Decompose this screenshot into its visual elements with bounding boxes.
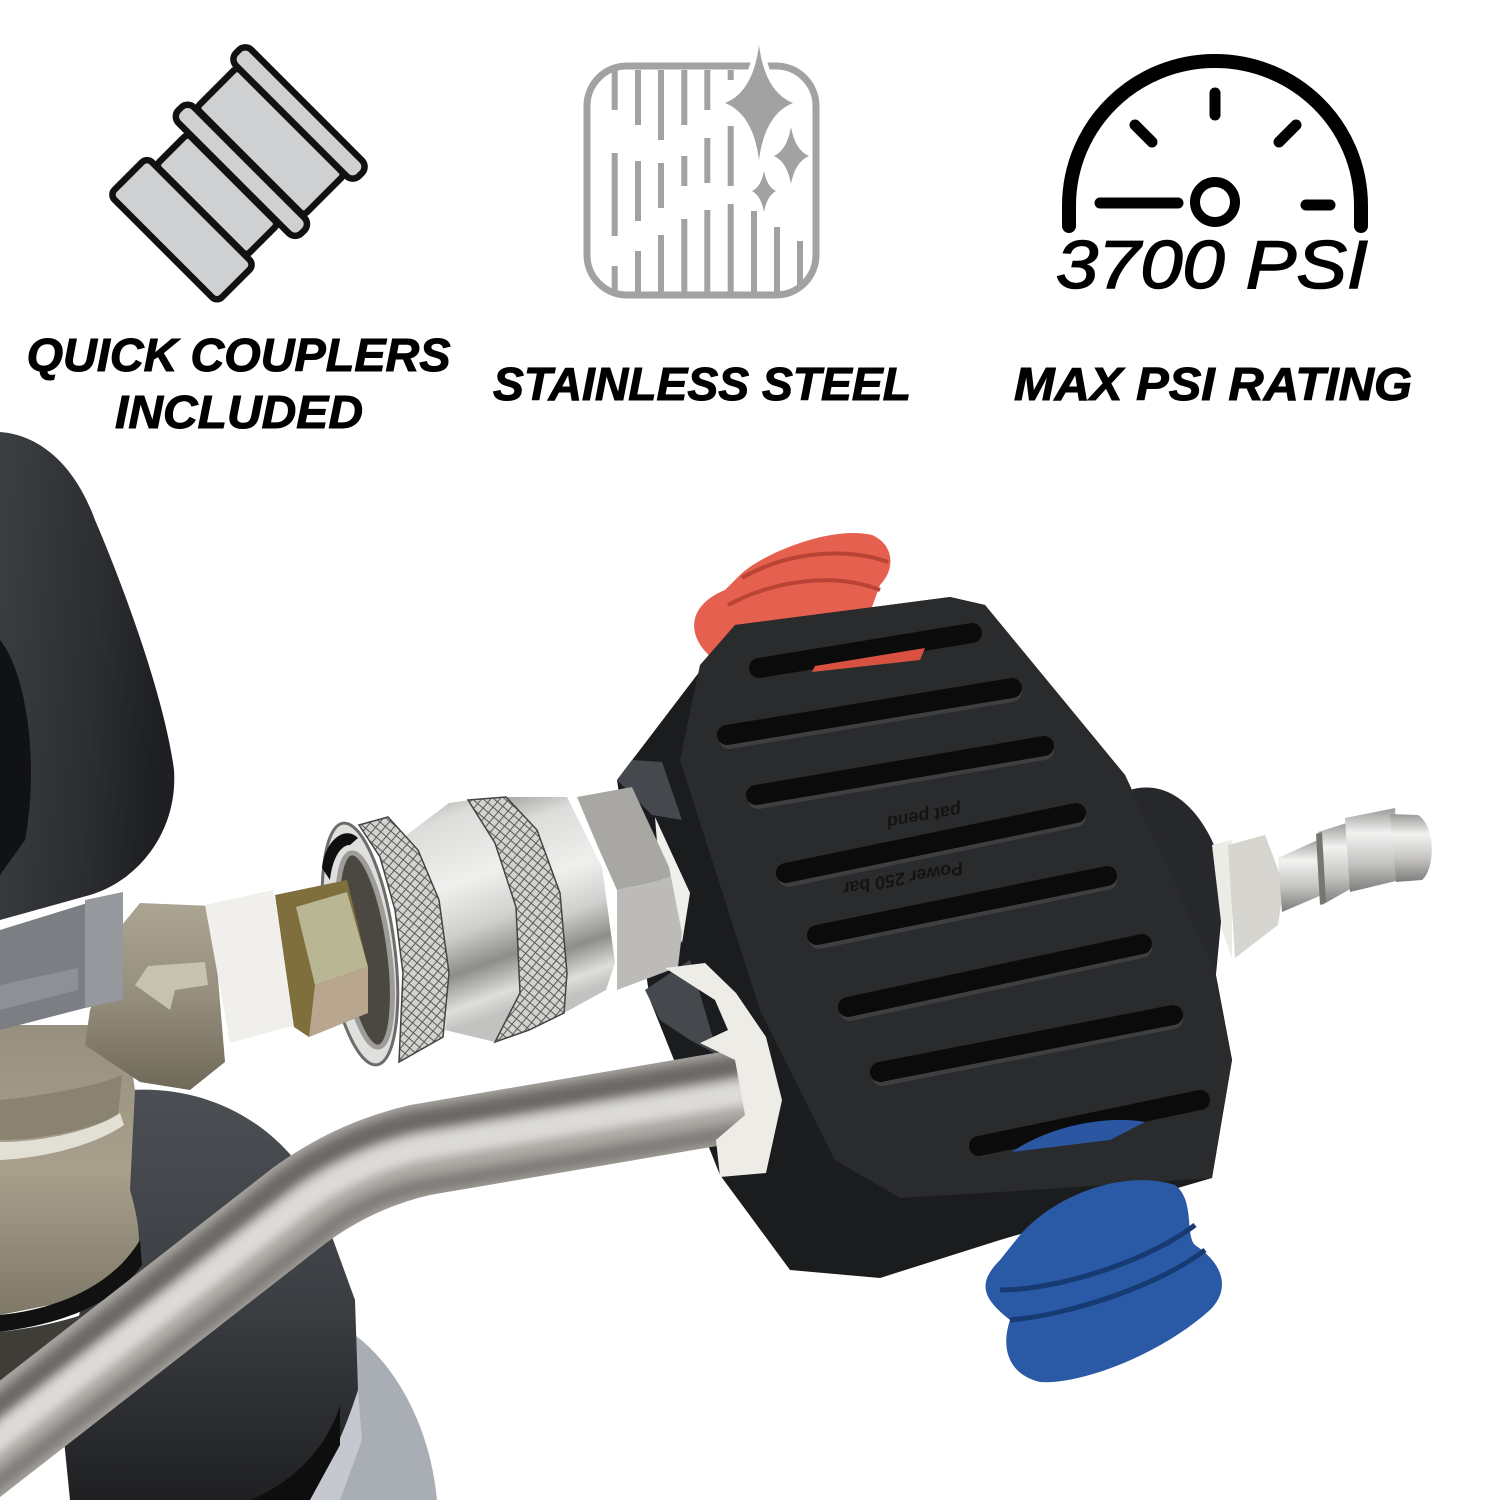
heading: max psi rating: MAX PSI RATING xyxy=(1014,358,1412,410)
hub moulded lettering: Power 250 bar xyxy=(840,858,965,899)
knob xyxy=(0,432,174,1030)
gauge value: 3700 PSI xyxy=(1056,227,1368,303)
black hub xyxy=(617,597,1232,1278)
heading: quick couplers included: QUICK COUPLERS xyxy=(27,329,451,381)
icon: pressure gauge xyxy=(1069,61,1361,226)
heading: quick couplers included: INCLUDED xyxy=(115,386,363,438)
steel pipe xyxy=(0,1062,760,1500)
blue plug xyxy=(986,1180,1222,1382)
white sealant bracket xyxy=(665,963,782,1177)
rear outlet nipple xyxy=(1130,787,1432,987)
icon: stainless steel xyxy=(587,45,816,295)
threaded fitting xyxy=(205,880,368,1043)
quick coupler xyxy=(309,787,690,1070)
icon: quick couplers xyxy=(110,44,368,302)
product photo illustration xyxy=(0,432,1432,1500)
hub rib highlights xyxy=(729,692,1173,1076)
heading: stainless steel: STAINLESS STEEL xyxy=(493,358,911,410)
hub moulded lettering: pat pend xyxy=(884,800,964,833)
coupler front rim xyxy=(309,818,411,1070)
hub moulded lettering xyxy=(840,800,965,899)
red plug xyxy=(694,533,890,658)
hub ribs xyxy=(727,633,1200,1146)
base plate xyxy=(60,1090,437,1500)
valve body xyxy=(0,903,225,1420)
